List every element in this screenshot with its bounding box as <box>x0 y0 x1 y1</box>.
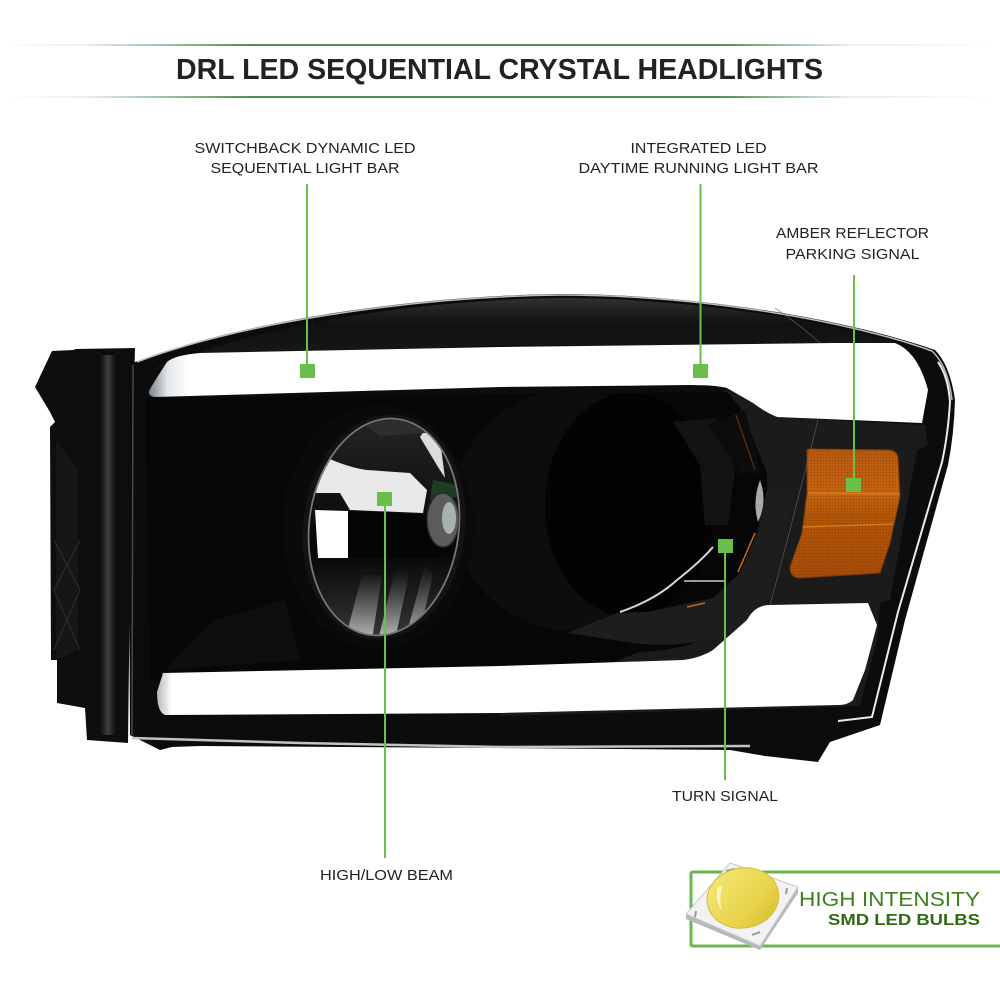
badge text: HIGH INTENSITY <box>799 889 980 911</box>
upper visor <box>150 298 925 372</box>
projector barrel <box>452 390 688 630</box>
wedge under the lens <box>165 600 300 670</box>
callout: switchback LED bar: SEQUENTIAL LIGHT BAR <box>210 160 400 177</box>
icon: LED chip <box>686 862 798 950</box>
callout: turn signal <box>672 539 778 805</box>
label: SWITCHBACK DYNAMIC LED <box>194 140 416 157</box>
callout: switchback LED bar <box>194 140 416 378</box>
label: TURN SIGNAL <box>672 788 778 805</box>
label: INTEGRATED LED <box>630 140 767 157</box>
clear outer lens edge <box>137 295 952 400</box>
label: AMBER REFLECTOR <box>776 225 929 242</box>
right chrome edge <box>838 362 950 721</box>
high/low beam lens <box>302 414 460 640</box>
mounting bracket <box>35 348 135 743</box>
amber reflector <box>790 449 900 578</box>
callout: daytime running light bar <box>578 140 819 378</box>
faint crack lines on the clear lens <box>770 308 820 605</box>
callout: amber reflector: PARKING SIGNAL <box>786 246 920 263</box>
bezel <box>500 388 928 716</box>
reflector bulb cap <box>427 493 459 547</box>
title: DRL LED SEQUENTIAL CRYSTAL HEADLIGHTS <box>176 54 823 86</box>
callout: high/low beam <box>320 492 453 884</box>
label: HIGH/LOW BEAM <box>320 867 453 884</box>
callout: amber reflector <box>776 225 929 492</box>
silver inner edge <box>132 365 133 735</box>
badge: high intensity SMD LED bulbs: SMD LED BULBS <box>828 912 980 929</box>
inner opening <box>145 392 767 680</box>
callout: daytime running light bar: DAYTIME RUNNING LIGHT BAR <box>578 160 819 177</box>
housing <box>128 294 955 762</box>
upper LED bar <box>149 343 928 423</box>
headlight illustration <box>35 294 955 762</box>
badge: high intensity SMD LED bulbs <box>686 862 1000 950</box>
lower LED bar <box>157 603 877 715</box>
lower clear lens strip <box>132 738 750 747</box>
lower bezel sweep <box>567 490 795 645</box>
projector chrome <box>620 410 764 612</box>
